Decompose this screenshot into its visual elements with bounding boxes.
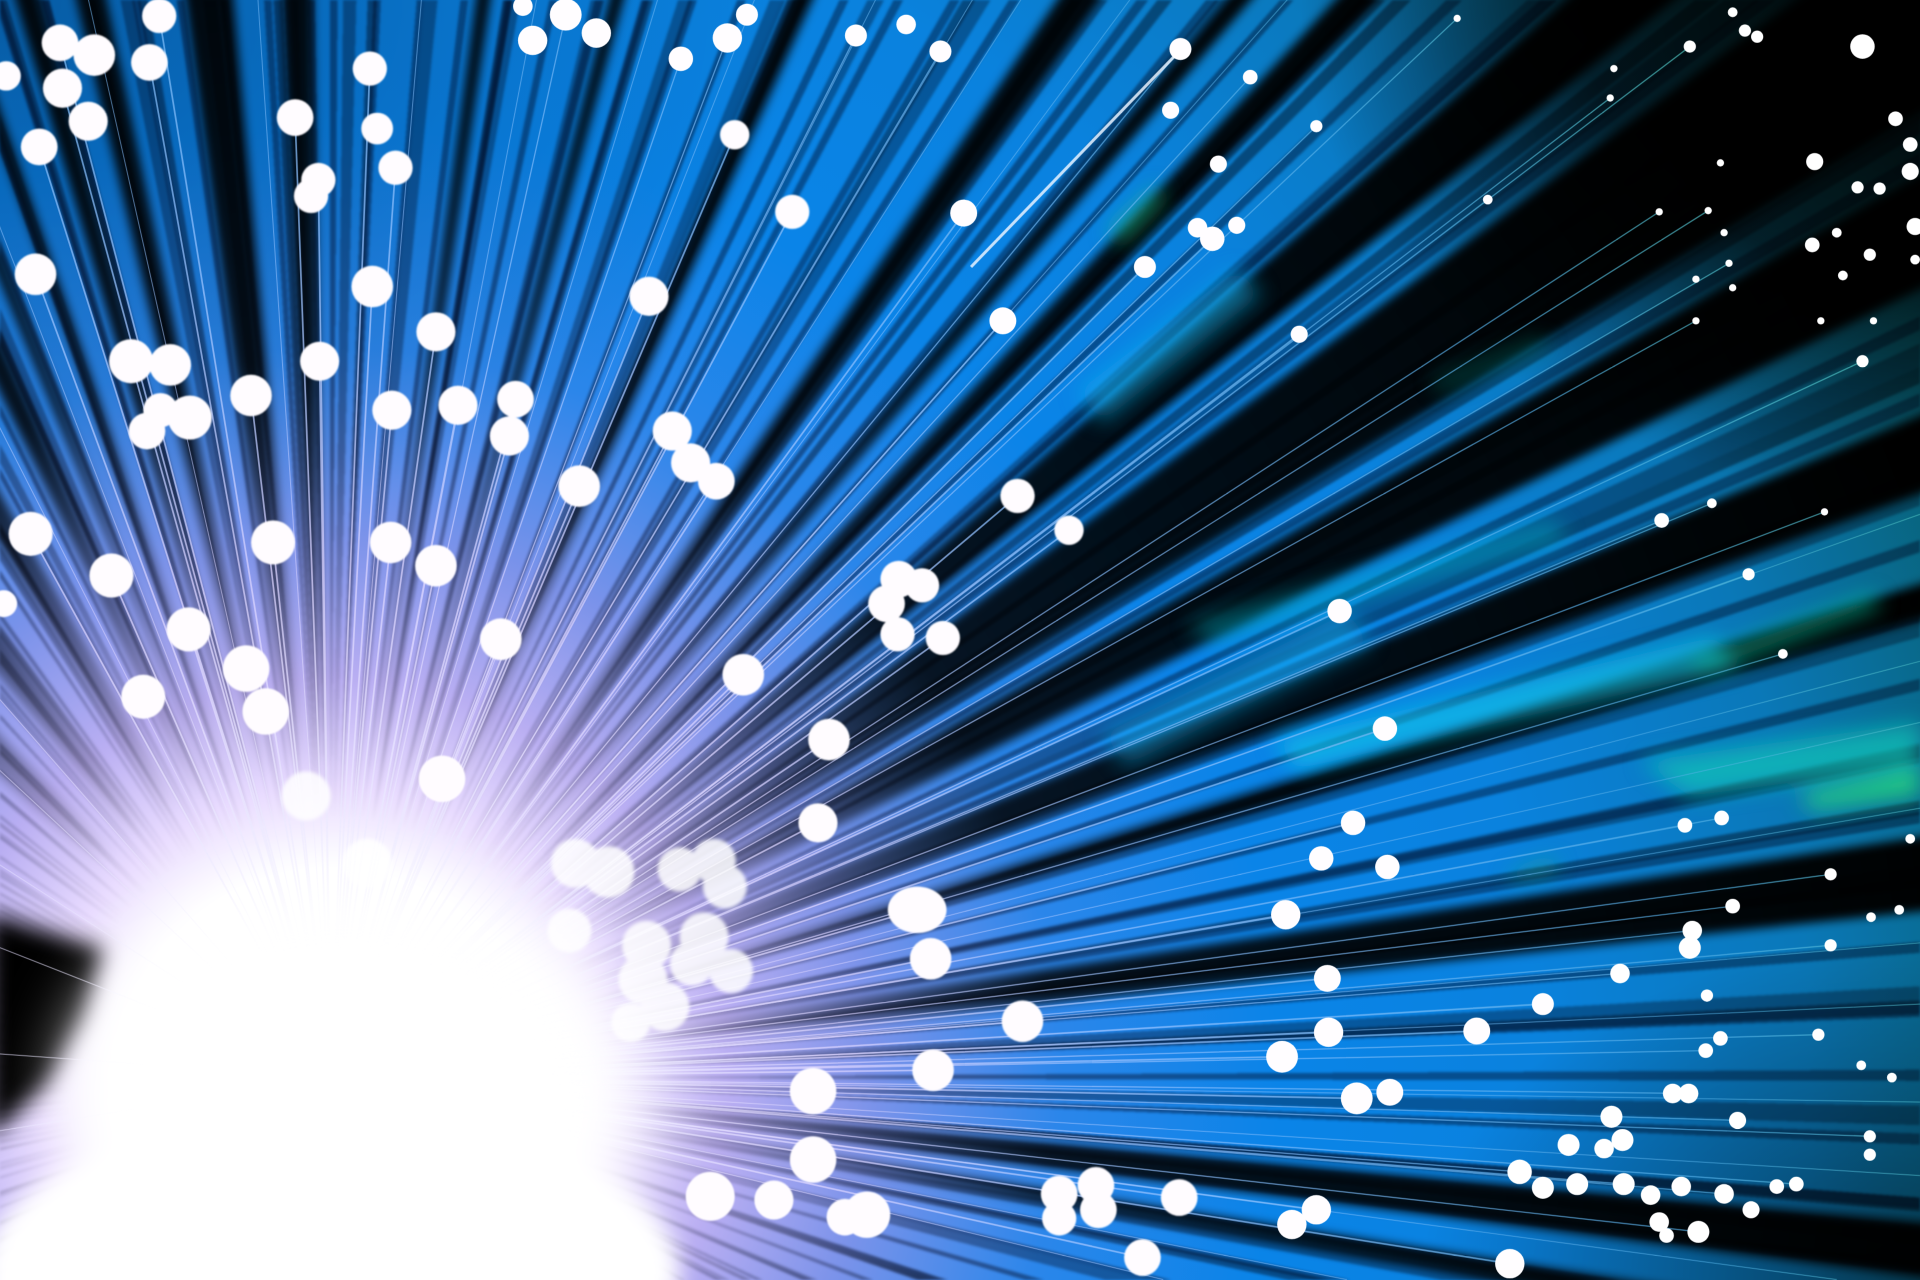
medium fiber tips: top and right	[513, 0, 1554, 1278]
teal and green light patches	[1078, 186, 1920, 879]
bright white fiber highlight	[971, 55, 1176, 267]
large fiber tips: left and centre	[0, 0, 1198, 1276]
hazy fiber tips around the core	[282, 771, 753, 1042]
glowing light source core	[0, 882, 680, 1280]
small fiber tips: far right	[1453, 7, 1920, 1243]
black void at left edge	[0, 912, 104, 1139]
